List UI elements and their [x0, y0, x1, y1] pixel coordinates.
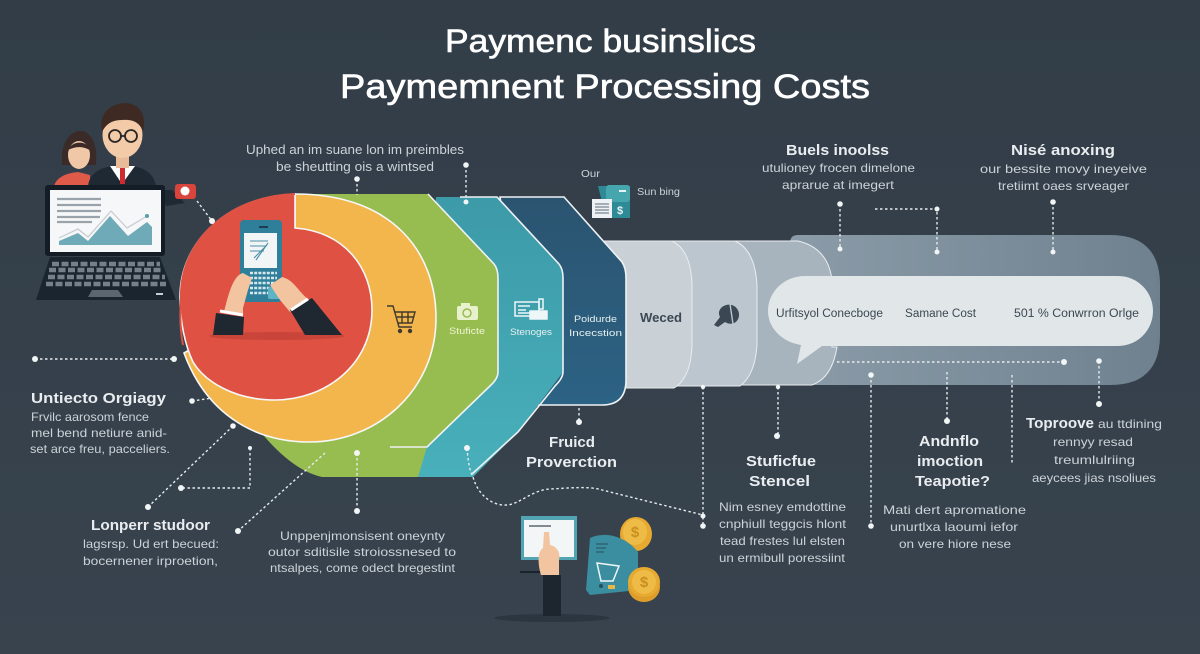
callout: untiecto orgiagy [30, 390, 170, 456]
title: Paymenc businslics [445, 23, 756, 59]
callout: stuficfue stencel: Stuficfue [746, 453, 816, 470]
callout: andnflo imoction: unurtlxa laoumi iefor [890, 520, 1018, 534]
callout: lonperr studoor: Lonperr studoor [91, 517, 210, 534]
small labels: receipt [581, 169, 680, 198]
dotted connector lines [32, 162, 1102, 534]
callout: buels inoolss: aprarue at imegert [782, 178, 895, 192]
callout: andnflo imoction: Mati dert apromatione [883, 503, 1026, 517]
panel: green segment [240, 194, 498, 477]
pill labels: Samane Cost [905, 308, 977, 320]
panel: grey segment 3 [700, 241, 837, 385]
segment labels: coloured bands [449, 314, 622, 339]
callout: fruicd proverction: Proverction [526, 454, 617, 471]
segment labels: coloured bands: Incecstion [569, 328, 622, 339]
segment label: weced: Weced [640, 310, 682, 325]
small labels: receipt: Sun bing [637, 187, 680, 198]
callout: toproove: Toproove [1026, 415, 1094, 432]
title: Paymemnent Processing Costs [340, 68, 870, 106]
illustration: payment with coins [494, 516, 660, 622]
icon: card [515, 299, 547, 319]
woman [54, 131, 96, 186]
callout: bottom centre text: outor sditisile stroiossnesed to [268, 545, 456, 559]
wallet box [586, 535, 638, 595]
callout: untiecto orgiagy: set arce freu, pacceliers. [30, 442, 170, 456]
panel: navy segment [500, 197, 626, 405]
callout: toproove: aeycees jias nsoliues [1032, 471, 1156, 485]
callout: fruicd proverction: Fruicd [549, 434, 595, 451]
callout: toproove: rennyy resad [1053, 435, 1133, 449]
callout: lonperr studoor [83, 517, 219, 568]
segment labels: coloured bands: Stuficte [449, 326, 485, 337]
hand pressing [539, 532, 561, 616]
callout: buels inoolss: Buels inoolss [786, 142, 889, 159]
callout: andnflo imoction: Teapotie? [915, 473, 990, 490]
callout: bottom centre text [268, 529, 456, 575]
callout: buels inoolss: utulioney frocen dimelone [762, 161, 915, 175]
callout: top centre: Uphed an im suane lon im preimbles [246, 142, 465, 157]
callout: toproove: au ttdining [1098, 417, 1162, 431]
coin stack: $ [640, 574, 649, 591]
coin top: $ [631, 524, 640, 541]
panel: grey segment 1 [590, 241, 692, 388]
icon: camera [457, 303, 478, 320]
panel: yellow segment [184, 194, 436, 442]
panel: grey segment 2 [640, 241, 757, 386]
callout: top centre: be sheutting ois a wintsed [276, 159, 434, 174]
icon: hands holding phone [209, 220, 345, 340]
callout: stuficfue stencel: tead frestes lul elsten [720, 534, 845, 548]
callout: lonperr studoor: lagsrsp. Ud ert becued: [83, 537, 219, 551]
callout: stuficfue stencel [719, 453, 847, 565]
arm with red badge [160, 184, 196, 206]
callout: nise anoxing [980, 142, 1147, 193]
callout: andnflo imoction: imoction [917, 453, 983, 470]
callout: stuficfue stencel: un ermibull poressiint [719, 551, 846, 565]
callout: bottom centre text: Unppenjmonsisent oneynty [280, 529, 445, 543]
callout: bottom centre text: ntsalpes, come odect bregestint [270, 561, 456, 575]
segment labels: coloured bands: Stenoges [510, 327, 552, 338]
man [88, 103, 156, 186]
coin stack [628, 567, 660, 602]
panel: teal segment [418, 197, 563, 477]
callout: lonperr studoor: bocernener irproetion, [83, 554, 218, 568]
callout: andnflo imoction: Andnflo [919, 433, 979, 450]
screen [520, 516, 577, 572]
front pill with callout tail [768, 276, 1153, 364]
coin top [620, 517, 652, 551]
callout: nise anoxing: tretiimt oaes srveager [998, 179, 1129, 193]
icon: receipt and wallet [592, 185, 630, 218]
callout: stuficfue stencel: Nim esney emdottine [719, 500, 846, 514]
illustration: laptop with people [36, 103, 196, 300]
pill labels: Urfitsyol Conecboge [776, 308, 883, 320]
callout: andnflo imoction: on vere hiore nese [899, 537, 1011, 551]
icon: pin tool [714, 304, 739, 327]
callout: nise anoxing: our bessite movy ineyeive [980, 162, 1147, 176]
callout: buels inoolss [762, 142, 915, 192]
funnel diagram [180, 194, 1160, 477]
callout: stuficfue stencel: cnphiull teggcis hlont [719, 517, 847, 531]
callout: stuficfue stencel: Stencel [749, 473, 810, 490]
pill labels: 501 % Conwrron Orlge [1014, 308, 1139, 320]
callout: untiecto orgiagy: mel bend netiure anid- [31, 426, 167, 440]
panel: back grey pill [790, 235, 1160, 385]
callout: toproove: treumlulriing [1054, 453, 1135, 467]
callout: andnflo imoction [883, 433, 1026, 551]
icon: shopping cart [387, 306, 415, 332]
callout: untiecto orgiagy: Untiecto Orgiagy [31, 390, 167, 407]
pill labels [776, 308, 1139, 320]
icon: receipt and wallet: $ [617, 205, 623, 217]
laptop [36, 185, 176, 300]
panel: red segment [180, 194, 372, 400]
callout: toproove [1026, 415, 1162, 485]
title [340, 23, 870, 106]
callout: untiecto orgiagy: Frvilc aarosom fence [31, 410, 149, 424]
segment labels: coloured bands: Poidurde [574, 314, 617, 325]
callout: fruicd proverction [526, 434, 617, 471]
small labels: receipt: Our [581, 169, 601, 180]
callout: top centre [246, 142, 465, 174]
callout: nise anoxing: Nisé anoxing [1011, 142, 1115, 159]
